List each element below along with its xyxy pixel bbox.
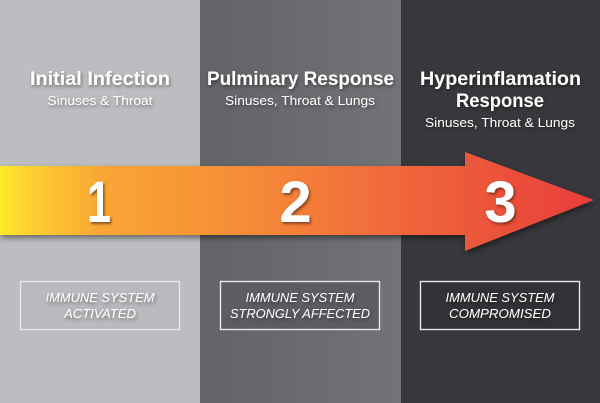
heading: stage 1: Initial Infection xyxy=(30,68,170,90)
heading: stage 1: Sinuses & Throat xyxy=(48,93,153,108)
panel: stage 3 background xyxy=(401,0,600,403)
arrow: progression gradient xyxy=(0,152,594,251)
callout: immune system strongly affected: STRONGLY AFFECTED xyxy=(230,306,370,321)
callout: immune system compromised: IMMUNE SYSTEM xyxy=(446,290,555,305)
heading: stage 3: Response xyxy=(456,90,544,112)
panel: stage 1 background xyxy=(0,0,200,403)
heading: stage 3: Sinuses, Throat & Lungs xyxy=(425,115,576,130)
callout: immune system activated: ACTIVATED xyxy=(63,306,136,321)
number 2: 2 xyxy=(279,170,312,235)
callout: immune system activated: IMMUNE SYSTEM xyxy=(46,290,155,305)
heading: stage 3 xyxy=(420,68,581,130)
number 1: 1 xyxy=(87,170,111,235)
callout: immune system compromised: COMPROMISED xyxy=(449,306,551,321)
heading: stage 3: Hyperinflamation xyxy=(420,68,581,90)
number 3: 3 xyxy=(484,170,517,235)
heading: stage 2: Pulminary Response xyxy=(207,69,394,90)
callout: immune system strongly affected xyxy=(220,282,380,330)
callout: immune system strongly affected: IMMUNE SYSTEM xyxy=(246,290,355,305)
callout: immune system compromised xyxy=(420,282,580,330)
heading: stage 1 xyxy=(30,68,170,108)
panel: stage 2 background xyxy=(200,0,401,403)
heading: stage 2 xyxy=(207,69,394,108)
heading: stage 2: Sinuses, Throat & Lungs xyxy=(225,93,376,108)
callout: immune system activated xyxy=(20,282,180,330)
